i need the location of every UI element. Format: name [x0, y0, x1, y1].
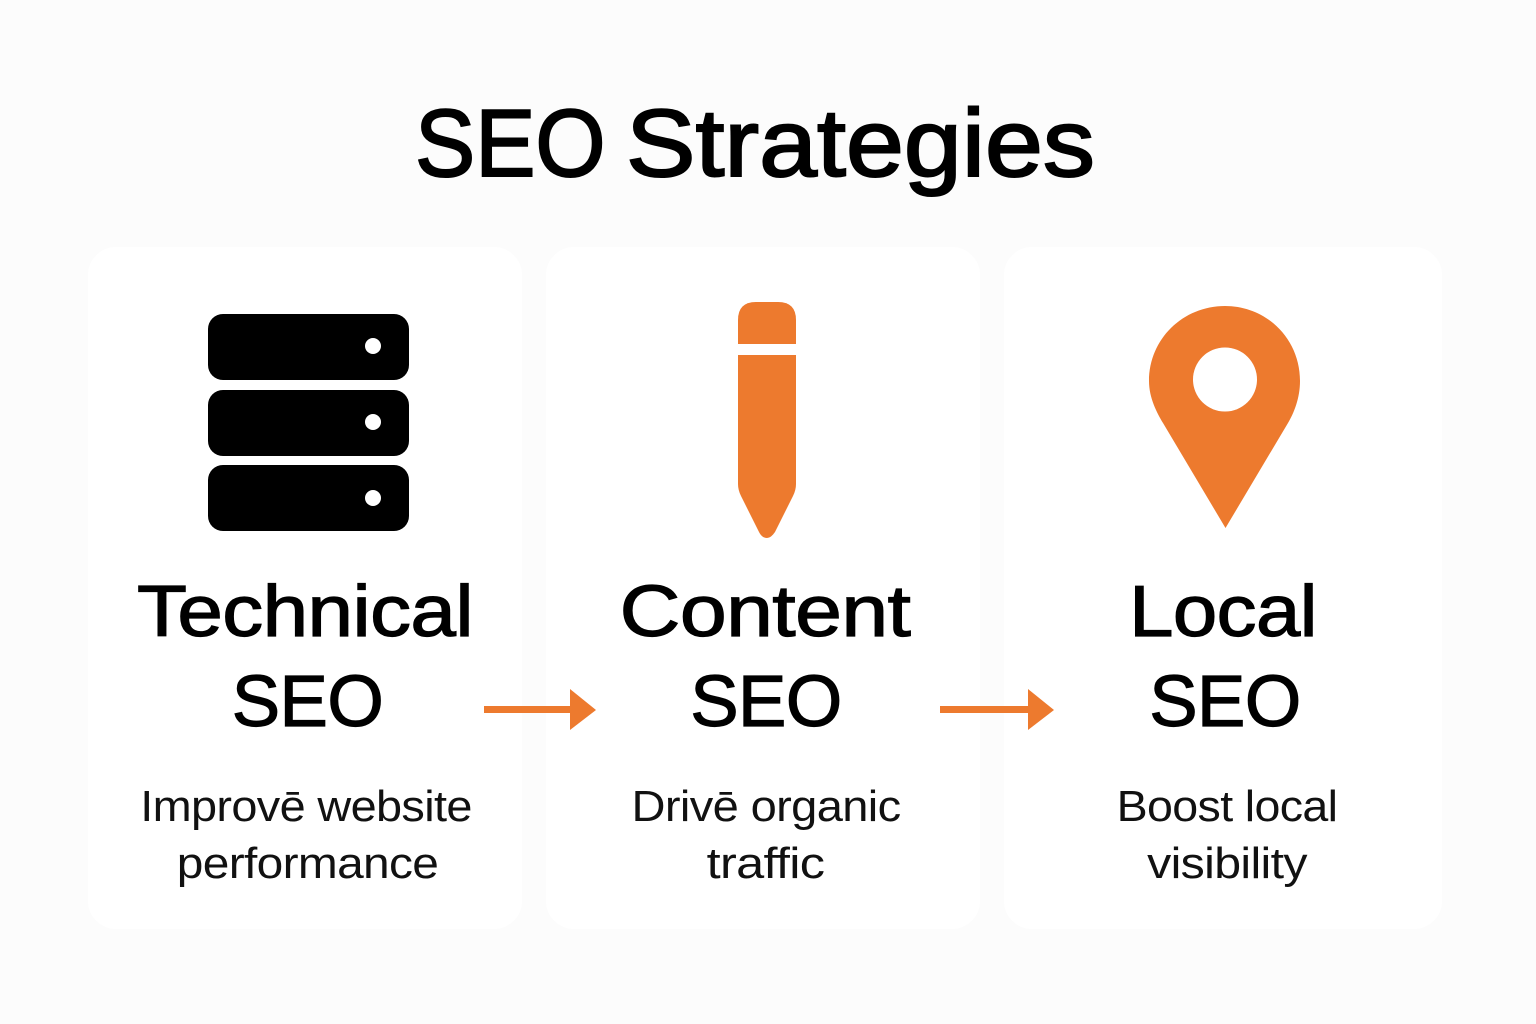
heading: local SEO: SEO [1149, 662, 1301, 742]
icon: pencil [738, 302, 796, 538]
text: local description: visibility [1147, 839, 1307, 888]
heading: technical SEO: Technical [137, 572, 473, 652]
text: technical description: performance [177, 839, 438, 888]
arrow: content to local [940, 689, 1054, 730]
heading: technical SEO [137, 572, 473, 742]
heading: local SEO [1129, 572, 1317, 742]
text: technical description [140, 782, 472, 888]
text: content description: Drivē organic [631, 782, 901, 831]
title [415, 90, 1095, 197]
heading: local SEO: Local [1129, 572, 1317, 652]
title: Strategies [626, 90, 1095, 197]
panel: content SEO [546, 247, 980, 929]
icon: map pin [1149, 306, 1300, 528]
text: technical description: Improvē website [140, 782, 472, 831]
text: local description: Boost local [1117, 782, 1337, 831]
text: content description [631, 782, 901, 888]
text: local description [1117, 782, 1337, 888]
heading: technical SEO: SEO [232, 662, 383, 742]
heading: content SEO: SEO [690, 662, 842, 742]
arrow: technical to content [484, 689, 596, 730]
title: SEO [415, 90, 606, 197]
panel: local SEO [1004, 247, 1442, 929]
panel: technical SEO [88, 247, 522, 929]
icon: server stack [208, 314, 409, 531]
heading: content SEO [620, 572, 911, 742]
text: content description: traffic [707, 839, 824, 888]
heading: content SEO: Content [620, 572, 910, 652]
